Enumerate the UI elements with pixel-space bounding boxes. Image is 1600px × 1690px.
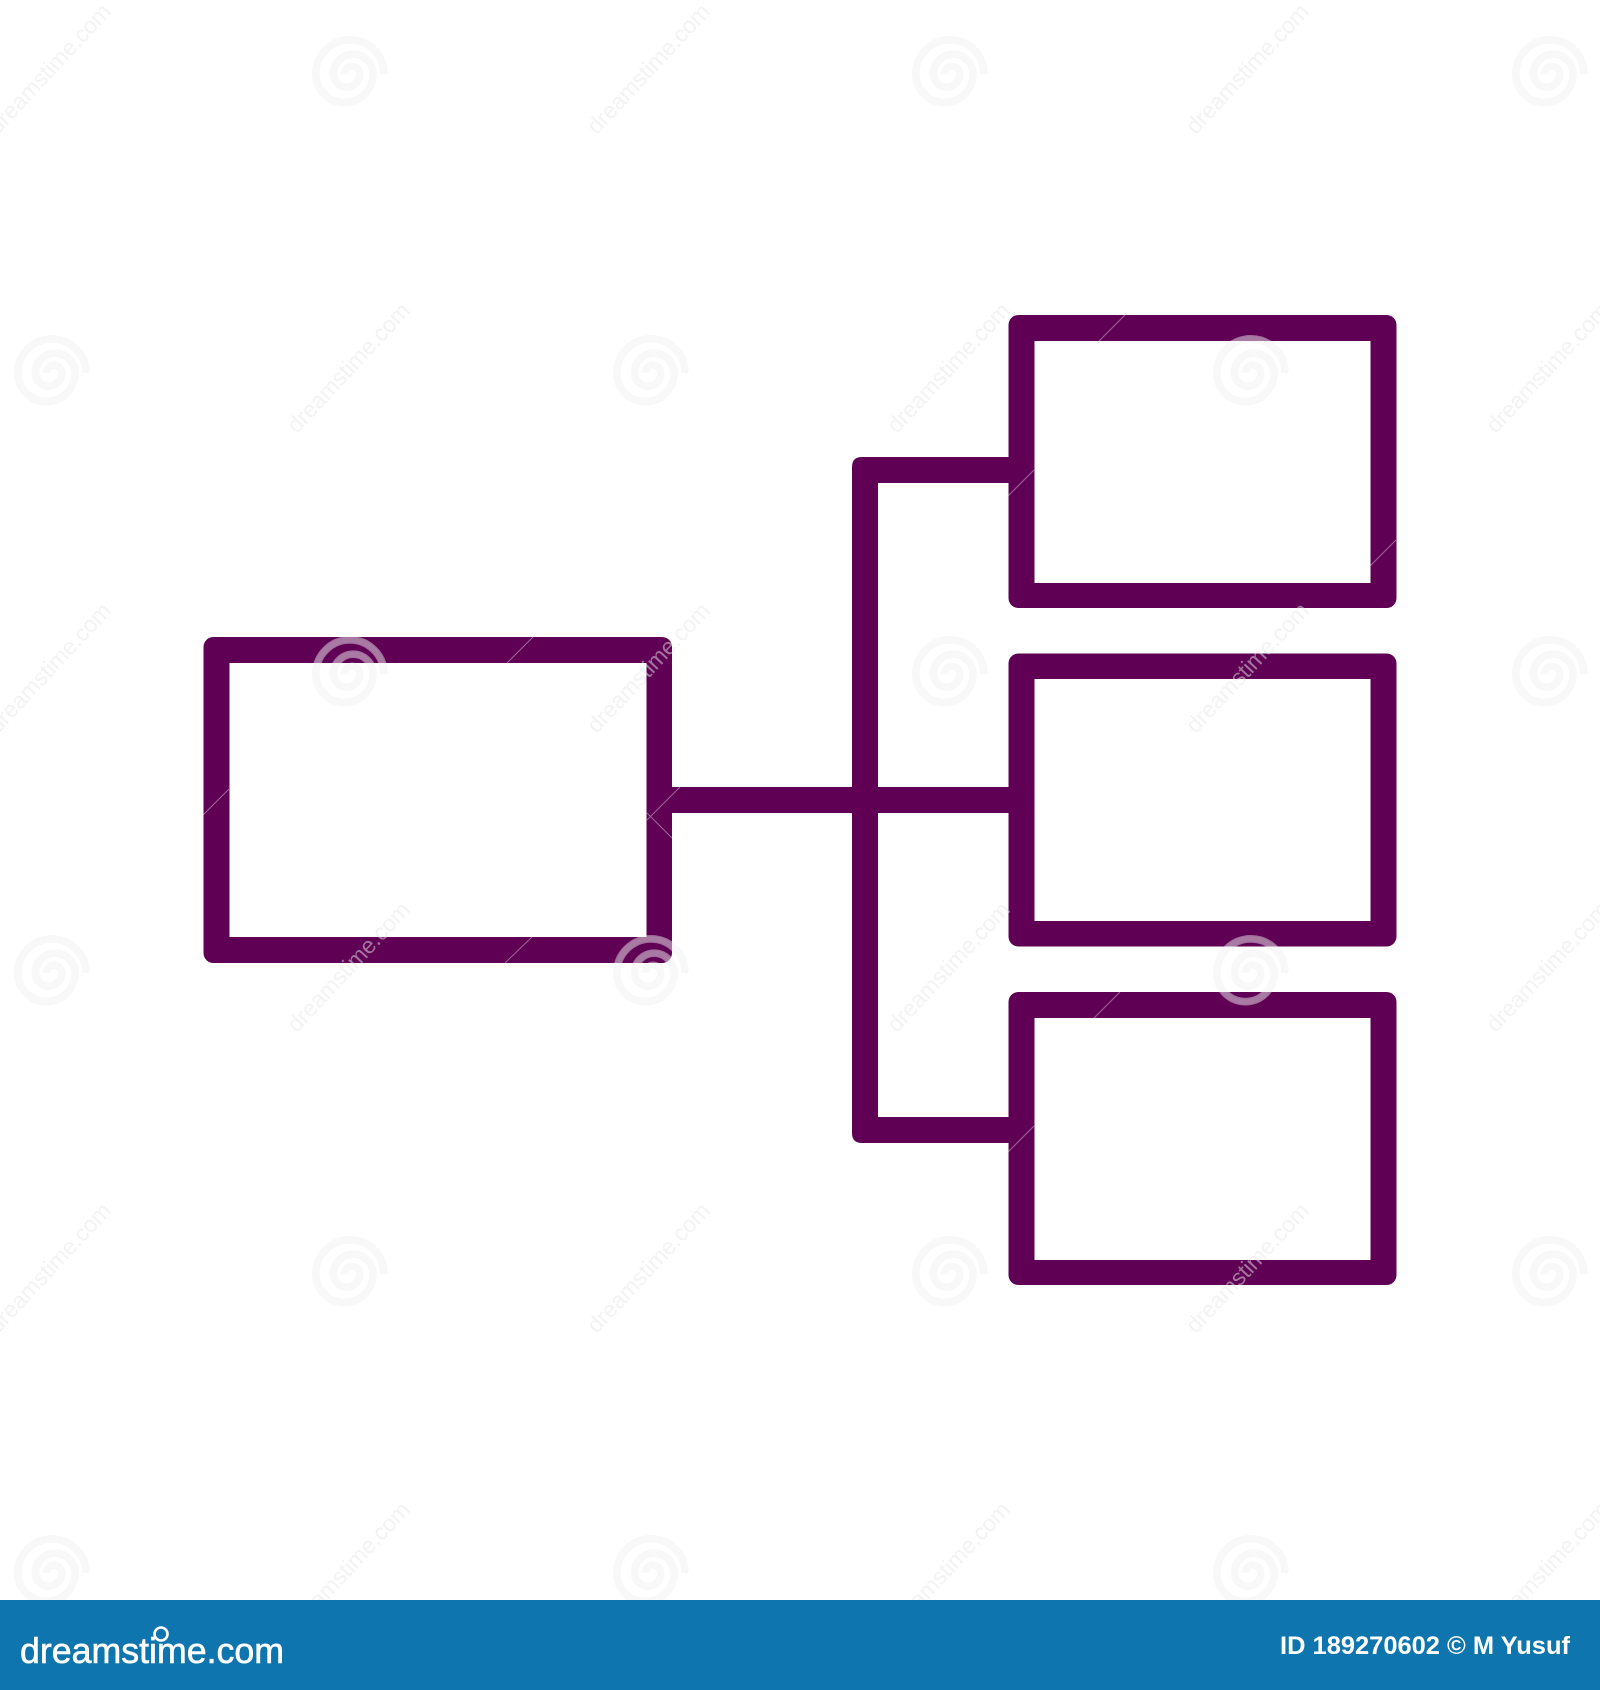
- box: middle child node: [1008, 654, 1396, 946]
- watermark: diagonal text: dreamstime.com: [881, 297, 1015, 438]
- watermark: diagonal text: dreamstime.com: [881, 1496, 1015, 1637]
- footer logo: dreamstime.com: dreamstime.com: [20, 1630, 284, 1671]
- watermark: thin diagonal lines: [203, 315, 1396, 1160]
- watermark: diagonal text: dreamstime.com: [581, 0, 715, 139]
- box: top child node: [1008, 315, 1396, 608]
- watermark: diagonal text: dreamstime.com: [581, 597, 715, 738]
- connector: trunk and branches: [660, 457, 1020, 1143]
- icon: logo spiral: [154, 1628, 168, 1640]
- watermark: diagonal text: dreamstime.com: [1180, 597, 1314, 738]
- watermark: diagonal text: dreamstime.com: [881, 896, 1015, 1037]
- footer bar: [0, 1600, 1600, 1690]
- watermark: diagonal text: dreamstime.com: [581, 1197, 715, 1338]
- box: parent node: [204, 637, 672, 963]
- watermark: diagonal text: dreamstime.com: [1180, 1197, 1314, 1338]
- watermark: diagonal text: dreamstime.com: [281, 297, 415, 438]
- watermark: diagonal text: dreamstime.com: [281, 1496, 415, 1637]
- footer credit: image ID and author: ID 189270602 © M Yusuf: [1280, 1632, 1571, 1660]
- box: bottom child node: [1008, 992, 1396, 1285]
- watermark: diagonal text: dreamstime.com: [1180, 0, 1314, 139]
- watermark: diagonal text: dreamstime.com: [281, 896, 415, 1037]
